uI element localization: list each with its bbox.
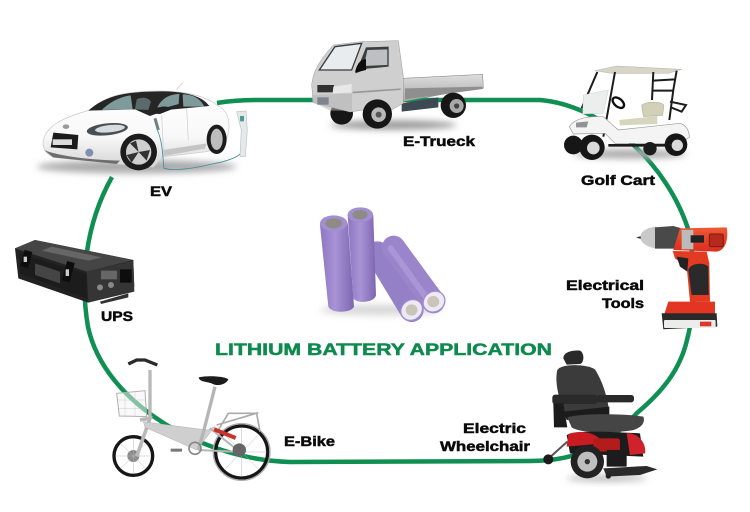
label: Electrical Tools — [566, 277, 644, 311]
icon: electric car — [37, 83, 247, 173]
title: LITHIUM BATTERY APPLICATION — [215, 340, 552, 359]
icon: electric bike — [114, 360, 270, 480]
green loop connector — [85, 100, 693, 462]
label: Electric Wheelchair: Electric — [463, 420, 526, 436]
label: Electric Wheelchair: Wheelchair — [440, 438, 531, 454]
icon: golf cart — [564, 66, 689, 160]
label: UPS: UPS — [101, 308, 133, 324]
label: Electrical Tools: Electrical — [566, 277, 644, 293]
label: E-Trueck: E-Trueck — [403, 133, 475, 149]
label: Electrical Tools: Tools — [602, 295, 644, 311]
icon: lithium battery cells — [320, 207, 449, 325]
label: E-Bike: E-Bike — [284, 433, 335, 449]
label: Golf Cart: Golf Cart — [581, 172, 655, 188]
icon: power wheelchair — [543, 351, 657, 482]
icon: truck — [312, 41, 483, 130]
icon: cordless drill — [636, 226, 727, 329]
label: EV: EV — [150, 183, 173, 199]
icon: portable power case — [15, 240, 134, 304]
label: Electric Wheelchair — [440, 420, 531, 454]
